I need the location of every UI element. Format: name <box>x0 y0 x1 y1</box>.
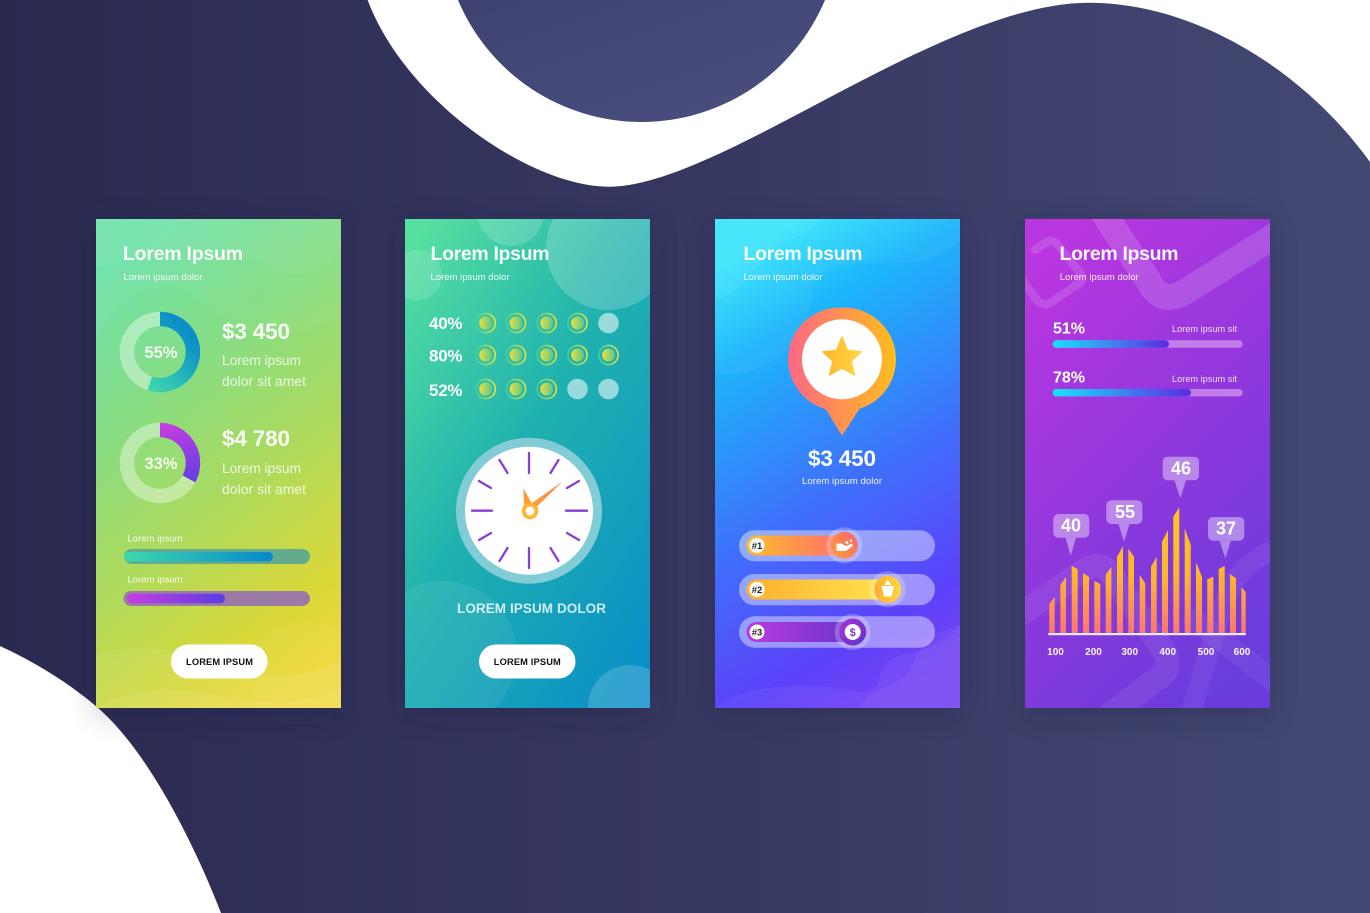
white top wave <box>368 0 1370 187</box>
top circle <box>458 0 825 122</box>
progress bar 1 <box>124 534 310 564</box>
axis labels: 600 <box>1234 647 1251 658</box>
button: LOREM IPSUM <box>494 657 561 667</box>
callout 37: 37 <box>1216 518 1236 538</box>
icon: hand with coins <box>836 540 853 551</box>
progress bar 1: Lorem ipsum <box>128 534 183 544</box>
value block 2: $4 780 <box>222 426 290 451</box>
panel: purple chart card <box>1025 219 1270 708</box>
ranked slider 1: #1 <box>752 541 763 552</box>
heading: Lorem Ipsum <box>123 243 243 265</box>
heading: Lorem Ipsum <box>744 243 862 265</box>
subheading: Lorem ipsum dolor <box>430 272 510 283</box>
ranked slider 2 <box>739 571 935 607</box>
donut 33%: 33% <box>144 455 178 473</box>
donut 55% <box>127 319 193 385</box>
icon: map pin with star <box>788 308 896 436</box>
card shadows <box>96 225 1270 714</box>
card 1 background <box>96 219 341 708</box>
value block 2: Lorem ipsum <box>222 461 301 476</box>
ranked slider 1 <box>739 527 935 563</box>
icon: cup <box>882 580 894 596</box>
progress bar 2 <box>124 574 310 606</box>
dot row 40% <box>429 313 619 333</box>
progress 78%: Lorem ipsum sit <box>1172 374 1237 384</box>
subheading: Lorem ipsum dolor <box>1060 272 1139 283</box>
value block 1: $3 450 <box>222 319 290 344</box>
donut 33% <box>127 430 193 496</box>
heading: Lorem Ipsum <box>430 243 550 265</box>
value block 2 <box>222 426 306 497</box>
value block 2: dolor sit amet <box>222 482 306 497</box>
progress 78%: 78% <box>1053 370 1085 386</box>
button: LOREM IPSUM <box>186 657 253 667</box>
panel: green finance card <box>96 219 341 708</box>
white bottom-left wave <box>0 646 221 913</box>
callout 40: 40 <box>1061 516 1081 536</box>
progress 51%: 51% <box>1053 320 1085 338</box>
callout 37 <box>1208 517 1244 558</box>
panel: blue ranking card <box>715 219 960 708</box>
callout 40 <box>1053 514 1089 556</box>
subheading: Lorem ipsum dolor <box>124 272 202 283</box>
ranked slider 3 <box>739 614 935 650</box>
button <box>171 644 268 678</box>
button <box>479 644 576 678</box>
card 3 background <box>715 219 960 708</box>
card 4 background <box>1025 219 1270 708</box>
clock caption: LOREM IPSUM DOLOR <box>457 601 606 616</box>
card 2 background <box>405 219 650 708</box>
ranked slider 3: #3 <box>752 628 762 639</box>
ranked slider 3: $ <box>850 627 856 639</box>
callout 55: 55 <box>1115 502 1135 522</box>
heading: Lorem Ipsum <box>1060 243 1178 265</box>
progress 51%: Lorem ipsum sit <box>1172 324 1237 334</box>
dot row 80%: 80% <box>429 346 462 366</box>
callout 55 <box>1106 500 1142 542</box>
value block 1: dolor sit amet <box>222 374 306 389</box>
subheading: Lorem ipsum dolor <box>744 272 822 283</box>
axis labels: 100 <box>1047 647 1064 658</box>
progress 51% <box>1053 320 1243 348</box>
dot row 52%: 52% <box>429 381 462 400</box>
callout 46 <box>1163 457 1199 498</box>
axis labels <box>1047 647 1251 658</box>
amount: $3 450 <box>808 446 876 471</box>
progress 78% <box>1053 370 1243 396</box>
clock <box>456 438 602 584</box>
bar chart <box>1048 507 1246 635</box>
amount caption: Lorem ipsum dolor <box>802 476 882 487</box>
dot row 40%: 40% <box>429 314 462 333</box>
axis labels: 300 <box>1121 647 1138 658</box>
value block 1 <box>222 319 306 389</box>
ranked slider 2: #2 <box>752 585 762 596</box>
progress bar 2: Lorem ipsum <box>128 574 183 586</box>
dot row 80% <box>429 345 618 366</box>
dot row 52% <box>429 379 619 400</box>
value block 1: Lorem ipsum <box>222 353 301 368</box>
axis labels: 200 <box>1085 647 1102 658</box>
donut 55%: 55% <box>144 344 178 362</box>
axis labels: 400 <box>1159 647 1176 658</box>
panel: teal clock card <box>405 219 650 708</box>
axis labels: 500 <box>1198 647 1215 658</box>
callout 46: 46 <box>1171 458 1191 478</box>
